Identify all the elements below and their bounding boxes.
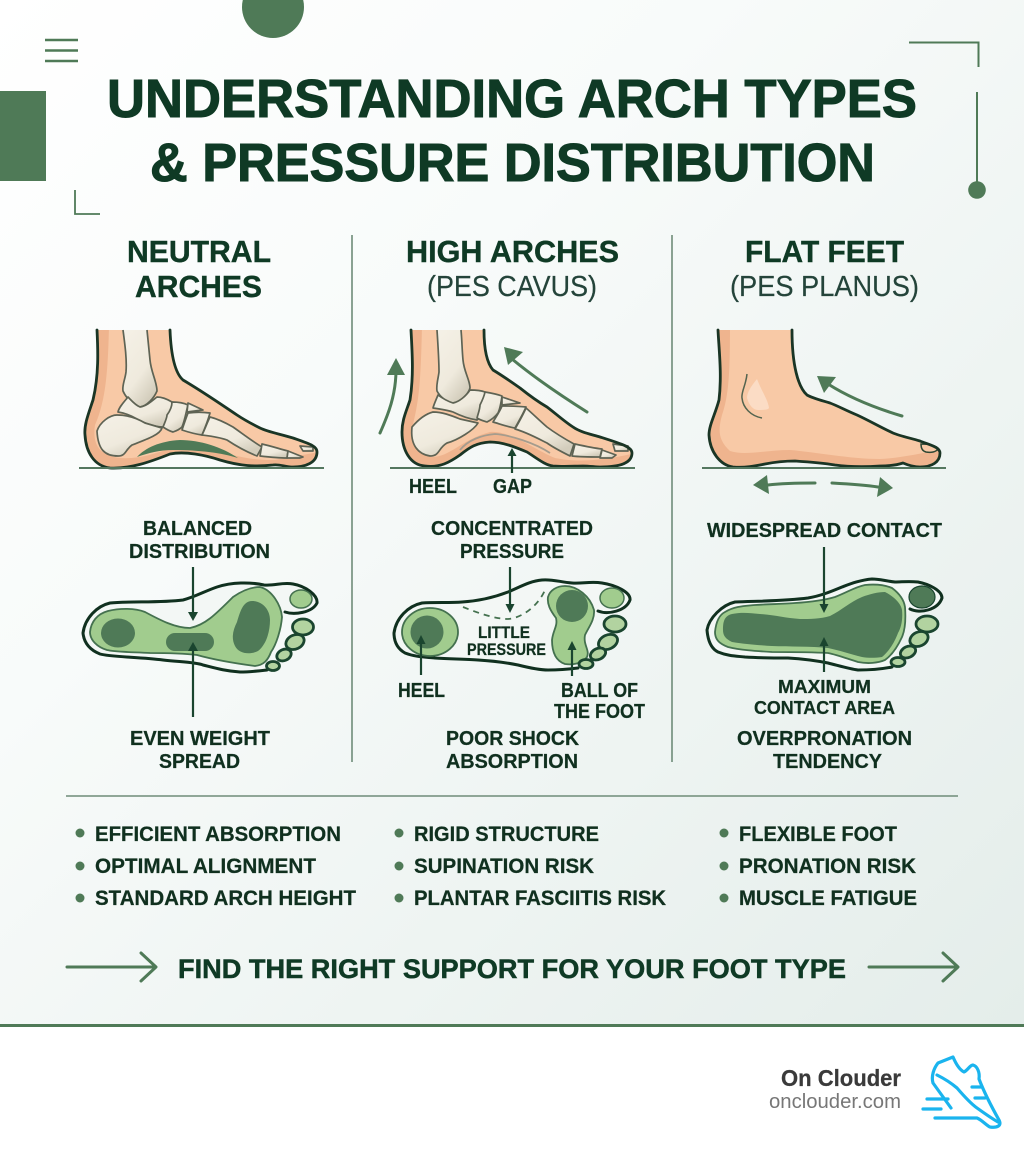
label: even weight spread: [130, 728, 270, 773]
column dividers: [66, 235, 958, 796]
label: little pressure: LITTLE: [478, 623, 530, 642]
footer rule: [0, 1024, 1024, 1027]
label: poor shock absorption: [446, 728, 580, 773]
arrow: spread forward: [832, 477, 893, 497]
heading: neutral arches: [127, 234, 271, 304]
label: overpronation tendency: OVERPRONATION: [737, 728, 912, 750]
arrow: gap: [508, 448, 516, 473]
brand text: onclouder.com: [769, 1091, 901, 1113]
heading: high arches: HIGH ARCHES: [406, 234, 619, 269]
label: overpronation tendency: TENDENCY: [773, 751, 883, 773]
list: flat feet traits: FLEXIBLE FOOT: [739, 823, 897, 846]
panel: neutral arches: [79, 234, 330, 773]
heading: high arches: (PES CAVUS): [427, 271, 597, 303]
panel: flat feet: [702, 234, 950, 773]
arrow: balanced distribution: [188, 567, 198, 621]
text: call to action: FIND THE RIGHT SUPPORT FOR YOUR FOOT TYPE: [178, 954, 846, 984]
arrow: maximum contact: [820, 637, 828, 672]
title: & PRESSURE DISTRIBUTION: [150, 133, 875, 193]
list: high arch traits: RIGID STRUCTURE: [414, 823, 599, 846]
list: neutral traits: STANDARD ARCH HEIGHT: [95, 887, 356, 910]
arrow: even weight spread: [188, 642, 198, 717]
decorative shapes: [0, 0, 986, 214]
illustration: neutral foot side view: [79, 325, 330, 468]
pressure map: high arch footprint: [394, 580, 630, 670]
arrow: ball point: [568, 641, 576, 676]
heading: flat feet: (PES PLANUS): [730, 271, 919, 303]
list: neutral traits: [76, 823, 356, 910]
label: poor shock absorption: POOR SHOCK: [446, 728, 580, 750]
label: balanced distribution: DISTRIBUTION: [129, 541, 270, 563]
label: maximum contact area: CONTACT AREA: [754, 698, 895, 718]
label: ball of the foot: THE FOOT: [554, 701, 645, 723]
pressure map: neutral footprint: [83, 583, 317, 672]
arrow: heel point: [416, 635, 426, 675]
list: flat feet traits: MUSCLE FATIGUE: [739, 887, 917, 910]
label: maximum contact area: MAXIMUM: [778, 677, 871, 697]
label: little pressure: [467, 623, 546, 659]
heading: flat feet: [730, 234, 919, 303]
label: heel: HEEL: [398, 680, 445, 702]
footer band: [0, 1027, 1024, 1154]
list: neutral traits: EFFICIENT ABSORPTION: [95, 823, 341, 846]
arrow: instep slope: [817, 376, 902, 416]
label: concentrated pressure: PRESSURE: [460, 541, 564, 563]
label: concentrated pressure: [431, 518, 593, 563]
label: concentrated pressure: CONCENTRATED: [431, 518, 593, 540]
arrow: left of call to action: [67, 953, 156, 981]
title: UNDERSTANDING ARCH TYPES: [107, 69, 917, 129]
list: high arch traits: SUPINATION RISK: [414, 855, 594, 878]
list: flat feet traits: PRONATION RISK: [739, 855, 916, 878]
heading: neutral arches: NEUTRAL: [127, 234, 271, 269]
arrow: widespread contact: [820, 547, 828, 613]
list: neutral traits: OPTIMAL ALIGNMENT: [95, 855, 316, 878]
call to action: [67, 953, 958, 984]
label: overpronation tendency: [737, 728, 912, 773]
arrow: spread backward: [753, 475, 815, 494]
panel: high arches: [380, 234, 645, 773]
label: widespread contact: WIDESPREAD CONTACT: [707, 520, 942, 542]
icon: running shoe logo: [923, 1057, 1000, 1127]
label: balanced distribution: [129, 518, 270, 563]
arrow: concentrated pressure: [506, 567, 514, 613]
label: heel: HEEL: [409, 476, 457, 498]
label: balanced distribution: BALANCED: [143, 518, 252, 540]
arrow: right of call to action: [869, 953, 958, 981]
label: even weight spread: SPREAD: [159, 751, 240, 773]
label: maximum contact area: [754, 677, 895, 718]
arrow: heel lift: [380, 358, 405, 433]
heading: high arches: [406, 234, 619, 303]
title: [107, 69, 917, 193]
list: flat feet traits: [720, 823, 917, 910]
label: little pressure: PRESSURE: [467, 640, 546, 659]
label: ball of the foot: BALL OF: [561, 680, 638, 702]
brand text: On Clouder: [781, 1065, 901, 1091]
heading: flat feet: FLAT FEET: [745, 234, 904, 269]
illustration: high arch foot side view: [390, 325, 640, 468]
label: ball of the foot: [554, 680, 645, 723]
brand text: [769, 1065, 901, 1113]
list: high arch traits: [394, 823, 666, 910]
heading: neutral arches: ARCHES: [135, 269, 262, 304]
arrow: instep rise: [504, 347, 587, 412]
label: poor shock absorption: ABSORPTION: [446, 751, 578, 773]
list: high arch traits: PLANTAR FASCIITIS RISK: [414, 887, 666, 910]
pressure map: flat footprint: [707, 579, 942, 670]
illustration: flat foot side view: [702, 325, 950, 468]
label: even weight spread: EVEN WEIGHT: [130, 728, 270, 750]
label: gap: GAP: [493, 476, 532, 498]
